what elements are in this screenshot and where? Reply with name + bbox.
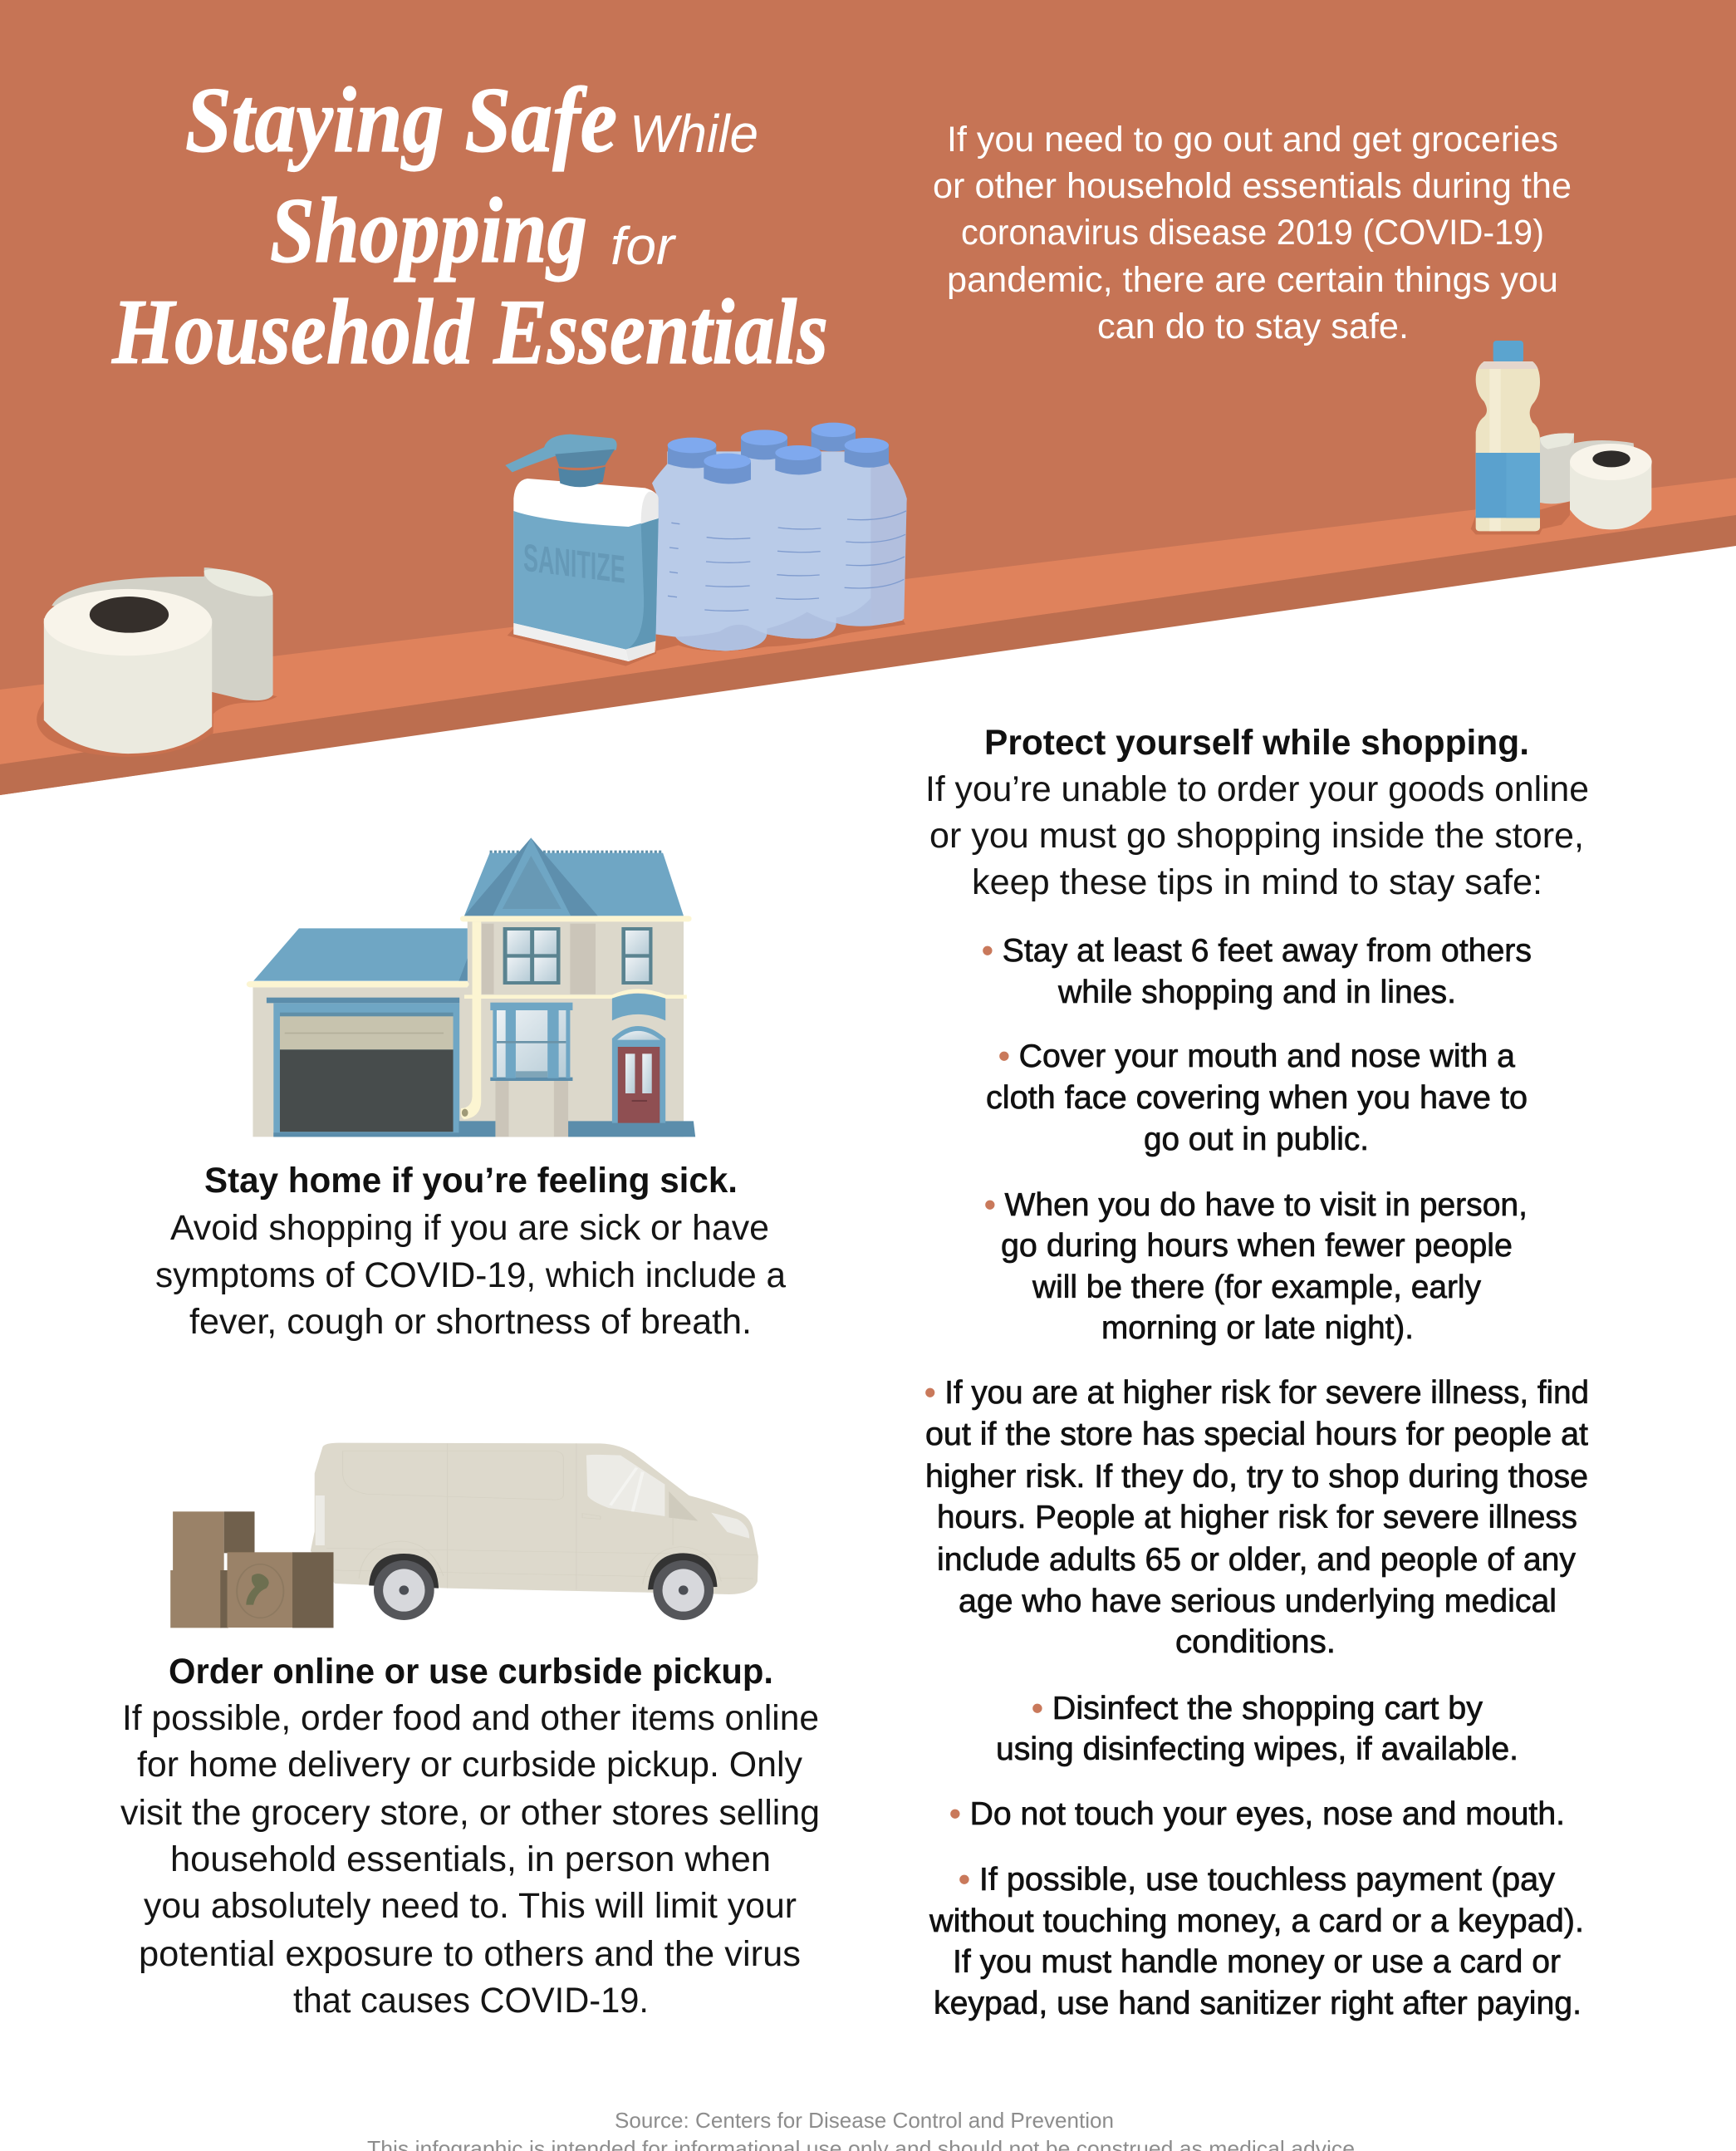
heading and text: stay home: symptoms of COVID-19, which include a: [155, 1255, 786, 1295]
icon: shelf shadow: [508, 619, 905, 666]
heading and text: order online: If possible, order food and other items online: [122, 1698, 819, 1738]
heading and text: stay home: fever, cough or shortness of breath.: [189, 1302, 752, 1342]
bay window: [490, 1003, 572, 1137]
bullet list: shopping tips: • When you do have to visit in person,: [984, 1187, 1528, 1223]
bullet list: shopping tips: • If you are at higher risk for severe illness, find: [924, 1375, 1589, 1411]
icon: hand sanitizer: [505, 435, 659, 661]
heading and text: protect yourself: If you’re unable to order your goods online: [925, 769, 1589, 809]
boxes: [170, 1511, 334, 1628]
intro text: If you need to go out and get groceries: [947, 120, 1558, 160]
intro text: or other household essentials during the: [933, 166, 1572, 206]
icon: delivery van and boxes: [170, 1443, 758, 1628]
heading and text: stay home: Stay home if you’re feeling sick.: [204, 1161, 738, 1201]
bullet list: shopping tips: • If possible, use touchless payment (pay: [959, 1862, 1556, 1898]
title: Shopping: [270, 179, 587, 282]
heading and text: order online: household essentials, in person when: [170, 1839, 771, 1879]
icon: house: [247, 837, 695, 1137]
footer source and disclaimer: Source: Centers for Disease Control and Prevention: [615, 2108, 1114, 2133]
bullet list: shopping tips: without touching money, a card or a keypad).: [929, 1903, 1584, 1939]
bullet list: shopping tips: If you must handle money or use a card or: [953, 1944, 1561, 1980]
heading and text: protect yourself: keep these tips in mind to stay safe:: [972, 862, 1542, 902]
footer source and disclaimer: [367, 2108, 1355, 2151]
heading and text: order online: potential exposure to others and the virus: [139, 1934, 801, 1974]
garage door: [267, 998, 459, 1137]
heading and text: protect yourself: Protect yourself while shopping.: [984, 723, 1529, 763]
bullet list: shopping tips: • Stay at least 6 feet away from others: [982, 933, 1532, 969]
van: [311, 1443, 758, 1620]
bullet list: shopping tips: include adults 65 or older, and people of any: [937, 1542, 1576, 1578]
heading and text: stay home: Avoid shopping if you are sick or have: [170, 1208, 769, 1248]
bullet list: shopping tips: hours. People at higher risk for severe illness: [937, 1500, 1577, 1535]
bullet list: shopping tips: using disinfecting wipes, if available.: [996, 1731, 1518, 1767]
title: [111, 69, 828, 384]
bullet list: shopping tips: [924, 933, 1589, 2021]
title: Staying Safe: [185, 69, 617, 172]
bullet list: shopping tips: out if the store has special hours for people at: [925, 1417, 1588, 1452]
icon: hand sanitizer: SANITIZE: [523, 536, 625, 592]
bullet list: shopping tips: conditions.: [1175, 1624, 1336, 1660]
bullet list: shopping tips: while shopping and in lines.: [1057, 975, 1456, 1010]
intro text: [933, 120, 1572, 346]
bullet list: shopping tips: will be there (for example, early: [1032, 1269, 1481, 1305]
bullet list: shopping tips: • Cover your mouth and nose with a: [998, 1039, 1515, 1074]
icon: bleach bottle: [1476, 341, 1540, 531]
front door: [612, 1026, 665, 1123]
heading and text: order online: [120, 1652, 820, 2021]
icon: paper towel roll: [37, 567, 277, 757]
icon: sanitizer and water bottles: [505, 423, 907, 666]
bullet list: shopping tips: cloth face covering when you have to: [986, 1080, 1528, 1116]
heading and text: protect yourself: or you must go shopping inside the store,: [929, 816, 1584, 856]
bullet list: shopping tips: go during hours when fewer people: [1001, 1228, 1513, 1264]
title: for: [611, 216, 677, 276]
title: Household Essentials: [111, 281, 828, 384]
upstairs windows: [503, 927, 652, 985]
bullet list: shopping tips: • Disinfect the shopping cart by: [1032, 1691, 1483, 1726]
intro text: pandemic, there are certain things you: [947, 260, 1558, 300]
icon: water bottles: [652, 423, 907, 651]
bullet list: shopping tips: keypad, use hand sanitizer right after paying.: [934, 1986, 1582, 2021]
heading and text: order online: visit the grocery store, or other stores selling: [120, 1793, 820, 1833]
heading and text: order online: that causes COVID-19.: [293, 1981, 649, 2021]
icon: toilet roll: [1540, 433, 1652, 529]
bullet list: shopping tips: morning or late night).: [1101, 1310, 1414, 1346]
intro text: can do to stay safe.: [1097, 307, 1409, 346]
icon: bottle and toilet roll: [1471, 341, 1652, 534]
bullet list: shopping tips: higher risk. If they do, try to shop during those: [925, 1459, 1588, 1495]
title: While: [630, 104, 758, 164]
heading and text: order online: you absolutely need to. This will limit your: [144, 1886, 797, 1926]
bullet list: shopping tips: • Do not touch your eyes, nose and mouth.: [949, 1796, 1565, 1832]
intro text: coronavirus disease 2019 (COVID-19): [961, 213, 1544, 253]
header background: [0, 0, 1736, 795]
heading and text: protect yourself: [925, 723, 1589, 902]
bullet list: shopping tips: age who have serious underlying medical: [959, 1584, 1557, 1619]
heading and text: order online: Order online or use curbside pickup.: [169, 1652, 773, 1692]
heading and text: stay home: [155, 1161, 786, 1342]
bullet list: shopping tips: go out in public.: [1144, 1122, 1369, 1157]
heading and text: order online: for home delivery or curbside pickup. Only: [137, 1745, 802, 1785]
